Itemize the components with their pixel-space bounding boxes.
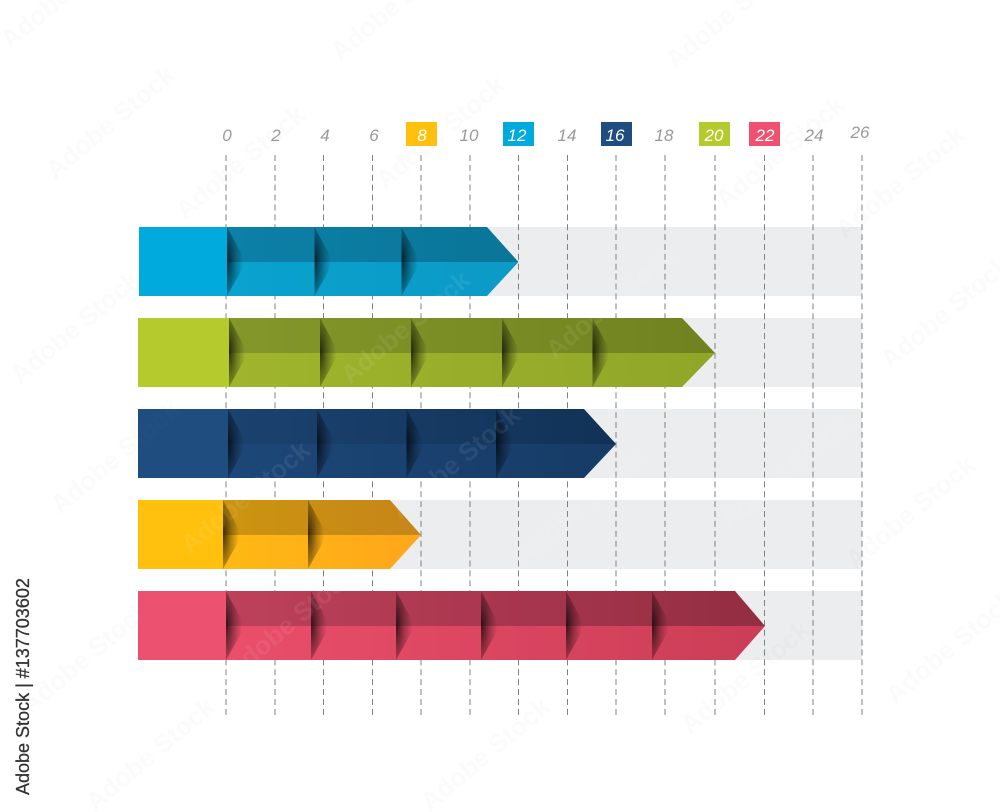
dashed vertical grid lines	[226, 155, 862, 715]
watermark pattern: Adobe Stock	[510, 444, 651, 570]
watermark pattern: Adobe Stock	[40, 59, 181, 185]
legend marker: 22: 22	[755, 126, 775, 145]
legend marker: 22	[749, 122, 780, 146]
legend marker: 8	[406, 122, 437, 146]
axis scale labels: 10	[460, 126, 479, 145]
axis scale labels	[222, 123, 870, 145]
legend marker: 16	[601, 122, 632, 146]
axis scale labels: 6	[369, 126, 379, 145]
axis scale labels: 2	[270, 126, 281, 145]
axis scale labels: 26	[850, 123, 870, 142]
bar: pink, value 22	[138, 591, 765, 660]
legend marker: 12: 12	[508, 126, 527, 145]
bar: yellow, value 8	[138, 500, 421, 569]
watermark pattern: Adobe Stock	[170, 99, 311, 225]
background track bands	[138, 227, 862, 660]
legend marker: 12	[503, 122, 534, 146]
watermark pattern: Adobe Stock	[710, 89, 851, 215]
axis scale labels: 14	[558, 126, 576, 145]
legend marker: 8: 8	[417, 126, 427, 145]
watermark pattern: Adobe Stock	[220, 559, 361, 685]
watermark pattern: Adobe Stock	[45, 394, 186, 520]
axis scale labels: 0	[222, 126, 232, 145]
watermark pattern: Adobe Stock	[840, 449, 981, 575]
bar: navy, value 16	[138, 409, 616, 478]
axis scale labels: 24	[804, 126, 823, 145]
watermark pattern: Adobe Stock	[540, 239, 681, 365]
bar: blue, value 12	[139, 227, 518, 296]
watermark pattern: Adobe Stock	[370, 69, 511, 195]
legend marker: 20	[699, 122, 730, 146]
watermark pattern: Adobe Stock	[15, 594, 156, 720]
bar: green, value 20	[138, 318, 715, 387]
watermark pattern: Adobe Stock	[5, 264, 146, 390]
axis scale labels: 18	[655, 126, 674, 145]
watermark pattern: Adobe Stock	[675, 614, 816, 740]
watermark pattern: Adobe Stock	[335, 264, 476, 390]
watermark pattern: Adobe Stock	[175, 434, 316, 560]
watermark pattern: Adobe Stock	[385, 399, 526, 525]
legend marker: 16: 16	[606, 126, 625, 145]
stock id caption: Adobe Stock | #137703602	[13, 578, 33, 795]
legend marker: 20: 20	[704, 126, 724, 145]
watermark pattern: Adobe Stock	[715, 409, 856, 535]
watermark pattern: Adobe Stock	[830, 119, 971, 245]
axis scale labels: 4	[320, 126, 330, 145]
